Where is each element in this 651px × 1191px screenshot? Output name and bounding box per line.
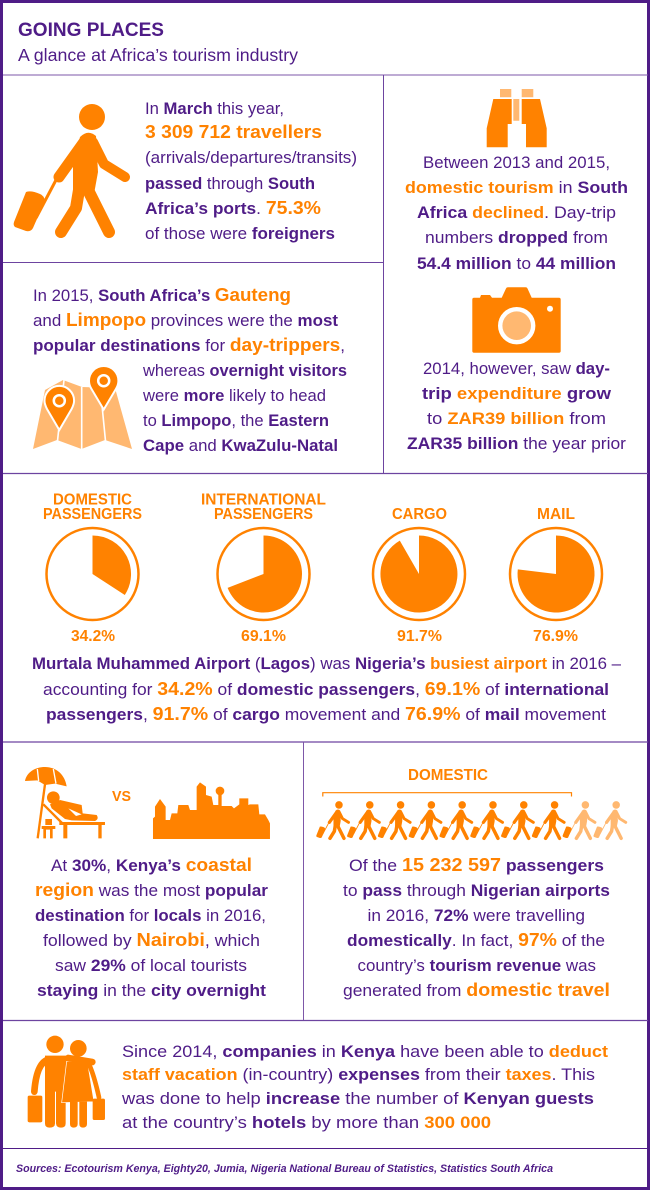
text: 15 232 597 passengers: to pass through Nigerian airports <box>343 882 610 900</box>
text: Kenya coastal region: destination for locals in 2016, <box>35 907 266 925</box>
text: day-trip expenditure: to ZAR39 billion from <box>427 410 606 428</box>
text: Murtala Muhammed Airport: accounting for 34.2% of domestic passengers , 69.1% of international <box>43 678 609 699</box>
chart: domestic passengers: PASSENGERS <box>43 506 142 523</box>
text: Gauteng and Limpopo: In 2015, South Africa’s Gauteng <box>33 284 291 305</box>
text: Gauteng and Limpopo: popular destinations for day-trippers, <box>33 334 345 355</box>
text: Gauteng and Limpopo: to Limpopo, the Eastern <box>143 412 329 430</box>
panel: provinces <box>33 284 347 455</box>
text: staff vacation deduction: was done to help increase the number of Kenyan guests <box>121 1090 594 1108</box>
chart: international passengers: INTERNATIONAL <box>201 492 326 508</box>
chart: domestic passengers <box>43 492 142 645</box>
text: 15 232 597 passengers: in 2016, 72% were travelling <box>368 907 585 925</box>
pictogram: ten passengers <box>316 801 626 838</box>
text: 15 232 597 passengers: Of the 15 232 597 passengers <box>349 854 604 875</box>
panel: Lagos airport pies <box>32 492 622 724</box>
subtitle: A glance at Africa’s tourism industry <box>18 45 298 65</box>
text: Kenya coastal region <box>35 854 269 1000</box>
text: March travellers: In March this year, <box>145 100 284 118</box>
chart: international passengers <box>201 492 326 645</box>
panel: Nigeria passengers <box>316 767 626 1000</box>
chart: mail: MAIL <box>537 506 575 523</box>
text: Murtala Muhammed Airport: passengers , 91.7% of cargo movement and 76.9% of mail movement <box>46 703 606 724</box>
chart: mail: 76.9% <box>533 628 578 645</box>
text: domestic tourism declined: numbers dropped from <box>425 229 608 247</box>
chart: cargo: CARGO <box>392 506 447 523</box>
text: Gauteng and Limpopo: Cape and KwaZulu-Natal <box>143 437 338 455</box>
text: March travellers: passed through South <box>145 175 315 193</box>
text: 15 232 597 passengers: country’s tourism revenue was <box>358 957 596 975</box>
text: staff vacation deduction: staff vacation (in-country) expenses from their taxes. This <box>122 1066 595 1084</box>
chart: international passengers: PASSENGERS <box>214 506 313 523</box>
title: GOING PLACES <box>18 20 164 41</box>
text: Kenya coastal region: At 30%, Kenya’s coastal <box>51 854 252 875</box>
text: domestic tourism declined: 54.4 million to 44 million <box>417 255 616 273</box>
text: March travellers: 3 309 712 travellers <box>145 122 322 142</box>
icon: traveller with suitcase <box>14 104 125 232</box>
panel: Kenya coast vs city <box>25 767 270 1000</box>
panel: South Africa domestic tourism <box>405 89 628 453</box>
chart: mail <box>510 506 602 645</box>
icon: sunbather under umbrella <box>25 767 105 838</box>
text: Murtala Muhammed Airport <box>32 655 622 724</box>
text: domestic tourism declined <box>405 154 628 273</box>
text: day-trip expenditure <box>407 360 627 453</box>
sources: Sources: Ecotourism Kenya, Eighty20, Jumia, Nigeria National Bureau of Statistics, Statistics South Africa <box>16 1163 553 1175</box>
text: day-trip expenditure: ZAR35 billion the year prior <box>407 435 627 453</box>
bracket <box>323 793 572 796</box>
text: March travellers <box>145 100 357 243</box>
text: Murtala Muhammed Airport: Murtala Muhammed Airport (Lagos) was Nigeria’s busiest airport in 2016 – <box>32 655 622 673</box>
text: staff vacation deduction: at the country’s hotels by more than 300 000 <box>122 1114 491 1132</box>
icon: camera <box>472 287 561 353</box>
icon: city skyline <box>153 782 270 839</box>
text: staff vacation deduction: Since 2014, companies in Kenya have been able to deduct <box>122 1043 609 1061</box>
panel: South Africa ports <box>14 100 357 243</box>
icon: couple with suitcases <box>28 1036 105 1128</box>
text: domestic tourism declined: Africa declined . Day-trip <box>417 204 616 222</box>
text: Kenya coastal region: staying in the city overnight <box>37 982 267 1000</box>
icon: binoculars <box>487 89 547 147</box>
text: Gauteng and Limpopo: were more likely to head <box>142 387 326 405</box>
text: vs: VS <box>112 788 131 805</box>
chart: domestic passengers: 34.2% <box>71 628 115 645</box>
text: domestic tourism declined: domestic tourism in South <box>405 179 628 197</box>
text: domestic tourism declined: Between 2013 and 2015, <box>423 154 610 172</box>
panel: Kenya staff vacation <box>28 1036 609 1132</box>
text: Gauteng and Limpopo: whereas overnight visitors <box>142 362 347 380</box>
text: day-trip expenditure: 2014, however, saw day- <box>423 360 610 378</box>
text: 15 232 597 passengers: generated from domestic travel <box>343 979 610 1000</box>
chart: cargo: 91.7% <box>397 628 442 645</box>
label: domestic: DOMESTIC <box>408 767 488 784</box>
icon: map with pins <box>33 366 132 449</box>
text: Kenya coastal region: saw 29% of local tourists <box>55 957 247 975</box>
text: Gauteng and Limpopo <box>33 284 347 455</box>
text: Kenya coastal region: followed by Nairobi , which <box>43 929 260 950</box>
text: staff vacation deduction <box>121 1043 609 1132</box>
text: 15 232 597 passengers: domestically . In fact, 97% of the <box>347 929 605 950</box>
text: Gauteng and Limpopo: and Limpopo provinces were the most <box>33 309 339 330</box>
chart: cargo <box>373 506 465 645</box>
text: 15 232 597 passengers <box>343 854 610 1000</box>
text: March travellers: Africa’s ports . 75.3% <box>145 197 321 218</box>
text: Kenya coastal region: region was the most popular <box>35 879 269 900</box>
text: day-trip expenditure: trip expenditure grow <box>422 385 611 403</box>
text: March travellers: of those were foreigners <box>145 225 335 243</box>
chart: international passengers: 69.1% <box>241 628 286 645</box>
chart: domestic passengers: DOMESTIC <box>53 492 132 508</box>
text: March travellers: (arrivals/departures/transits) <box>145 149 357 167</box>
